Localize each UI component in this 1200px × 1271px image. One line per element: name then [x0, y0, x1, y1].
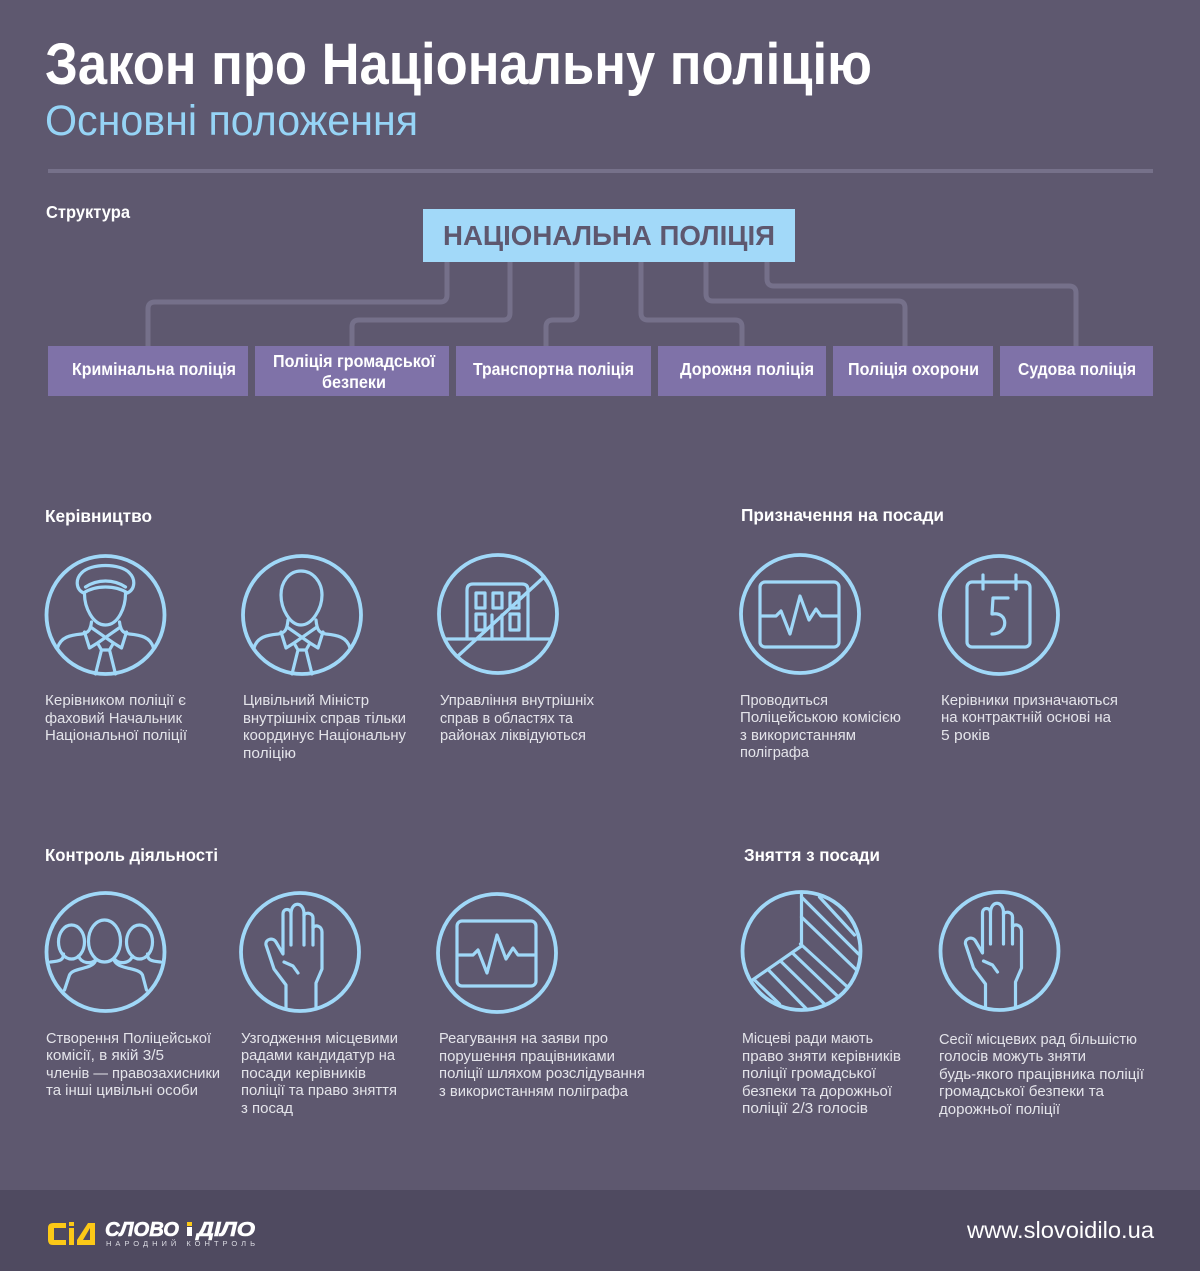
- text: response to complaints: Реагування на заяви про: [439, 1031, 608, 1047]
- box: Національна поліція: [423, 209, 795, 262]
- heading: Призначення на посади: Призначення на посади: [741, 505, 944, 525]
- logo: Слово і Діло: НАРОДНИЙ КОНТРОЛЬ: [106, 1239, 255, 1248]
- heading: Контроль діяльності: Контроль діяльності: [45, 845, 218, 865]
- text: head of police: Керівником поліції є: [45, 693, 187, 709]
- heading: Керівництво: Керівництво: [45, 506, 152, 526]
- box: Дорожня поліція: Дорожня поліція: [680, 359, 814, 379]
- icon: civilian minister: [243, 556, 361, 674]
- text: civilian minister: координує Національну: [243, 728, 407, 744]
- icon: group of people: [46, 893, 164, 1011]
- box: Транспортна поліція: Транспортна поліція: [473, 359, 634, 379]
- footer band: [0, 1190, 1200, 1271]
- text: contract five years: на контрактній основі на: [941, 710, 1112, 726]
- logo: Слово і Діло: ДІЛО: [195, 1219, 256, 1241]
- text: head of police: [45, 693, 187, 744]
- text: police commission polygraph: Поліцейською комісією: [740, 710, 901, 726]
- icon: crossed-out building: [439, 555, 557, 673]
- logo: Слово і Діло: [48, 1219, 256, 1248]
- text: local councils approval: Узгодження місцевими: [241, 1031, 398, 1047]
- text: local councils approval: [241, 1031, 398, 1117]
- icon: pie chart two thirds hatched: [742, 892, 860, 1010]
- text: response to complaints: порушення працівниками: [439, 1049, 615, 1065]
- text: council sessions: Сесії місцевих рад більшістю: [939, 1032, 1137, 1048]
- text: contract five years: 5 років: [941, 728, 990, 744]
- box: Поліція охорони: Поліція охорони: [848, 359, 979, 379]
- box: Поліція громадської безпеки: безпеки: [322, 372, 386, 392]
- icon: raised hand: [241, 893, 359, 1011]
- text: civilian minister: Цивільний Міністр: [243, 693, 369, 709]
- box: Судова поліція: [1000, 346, 1153, 396]
- text: police commission polygraph: [740, 693, 901, 761]
- text: local councils dismiss: поліції громадської: [742, 1066, 876, 1082]
- text: local councils dismiss: право зняти керівників: [742, 1049, 901, 1065]
- text: police commission: та інші цивільні особи: [46, 1083, 198, 1099]
- text: council sessions: будь-якого працівника поліції: [939, 1067, 1144, 1083]
- icon: calendar five: [940, 556, 1058, 674]
- text: council sessions: голосів можуть зняти: [939, 1049, 1086, 1065]
- text: head of police: Національної поліції: [45, 728, 187, 744]
- text: police commission polygraph: з використанням: [740, 728, 856, 744]
- text: council sessions: дорожньої поліції: [939, 1102, 1060, 1118]
- text: response to complaints: поліції шляхом розслідування: [439, 1066, 645, 1082]
- text: local councils dismiss: [742, 1031, 901, 1117]
- text: local councils approval: з посад: [241, 1101, 294, 1117]
- text: civilian minister: поліцію: [243, 746, 296, 762]
- heading: structure: Структура: [46, 202, 130, 222]
- icon: polygraph monitor: [741, 555, 859, 673]
- icon: polygraph monitor 2: [438, 894, 556, 1012]
- box: Національна поліція: НАЦІОНАЛЬНА ПОЛІЦІЯ: [443, 220, 775, 251]
- text: departments liquidated: [440, 693, 595, 744]
- box: Поліція громадської безпеки: [255, 346, 449, 396]
- heading: Зняття з посади: Зняття з посади: [744, 845, 880, 865]
- text: contract five years: Керівники призначаються: [941, 693, 1118, 709]
- logo: Слово і Діло: СЛОВО: [105, 1219, 179, 1241]
- title: Закон про Національну поліцію: [45, 32, 872, 97]
- text: response to complaints: з використанням поліграфа: [439, 1084, 629, 1100]
- text: civilian minister: [243, 693, 407, 762]
- box: Транспортна поліція: [456, 346, 651, 396]
- text: departments liquidated: справ в областях та: [440, 711, 574, 727]
- text: council sessions: громадської безпеки та: [939, 1084, 1105, 1100]
- text: police commission: Створення Поліцейської: [46, 1031, 211, 1047]
- website url: www.slovoidilo.ua: [966, 1217, 1154, 1243]
- text: police commission polygraph: поліграфа: [740, 745, 810, 761]
- box: Судова поліція: Судова поліція: [1018, 359, 1136, 379]
- text: response to complaints: [439, 1031, 645, 1100]
- subtitle: Основні положення: [45, 97, 418, 145]
- text: police commission: членів — правозахисники: [46, 1066, 220, 1082]
- text: local councils approval: посади керівників: [241, 1066, 366, 1082]
- text: local councils approval: радами кандидатур на: [241, 1048, 396, 1064]
- text: police commission: комісії, в якій 3/5: [46, 1048, 164, 1064]
- text: police commission polygraph: Проводиться: [740, 693, 828, 709]
- text: departments liquidated: районах ліквідуються: [440, 728, 586, 744]
- box: Дорожня поліція: [658, 346, 826, 396]
- text: departments liquidated: Управління внутрішніх: [440, 693, 595, 709]
- icon: raised hand 2: [940, 892, 1058, 1010]
- text: council sessions: [939, 1032, 1144, 1118]
- box: Поліція громадської безпеки: Поліція громадської: [273, 351, 436, 371]
- text: contract five years: [941, 693, 1118, 744]
- text: local councils approval: поліції та право зняття: [241, 1083, 397, 1099]
- text: civilian minister: внутрішніх справ тільки: [243, 711, 406, 727]
- text: local councils dismiss: поліції 2/3 голосів: [742, 1101, 868, 1117]
- text: local councils dismiss: безпеки та дорожньої: [742, 1084, 892, 1100]
- text: local councils dismiss: Місцеві ради мають: [742, 1031, 873, 1047]
- box: Поліція охорони: [833, 346, 993, 396]
- text: head of police: фаховий Начальник: [45, 711, 183, 727]
- box: Кримінальна поліція: [48, 346, 248, 396]
- text: police commission: [46, 1031, 220, 1099]
- box: Кримінальна поліція: Кримінальна поліція: [72, 359, 236, 379]
- org chart connectors: [148, 262, 1076, 346]
- icon: officer with cap: [46, 556, 164, 674]
